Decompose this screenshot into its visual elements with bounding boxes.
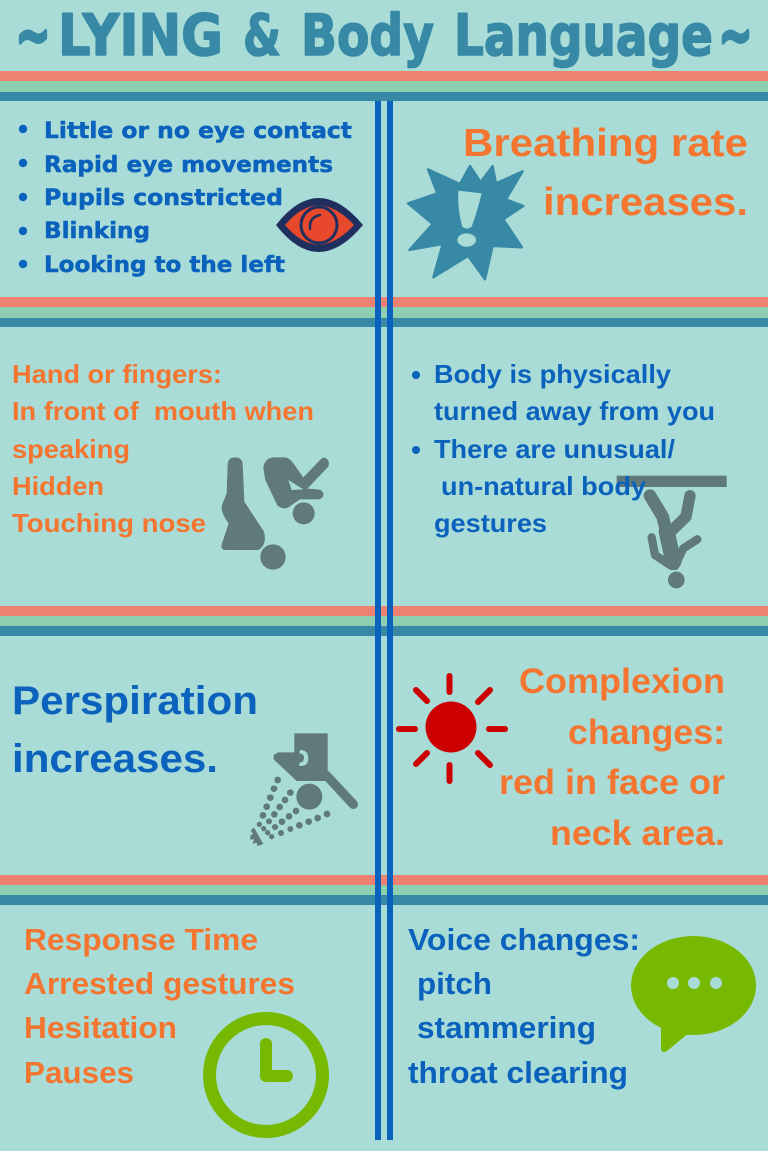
hand gestures text: Hidden bbox=[12, 471, 104, 501]
title: & bbox=[243, 3, 281, 69]
title: ~ bbox=[719, 3, 752, 69]
hand gestures text: Hand or fingers: bbox=[12, 359, 222, 389]
body posture list: un-natural body bbox=[441, 471, 647, 501]
breathing rate text: Breathing rate bbox=[463, 122, 748, 165]
complexion text bbox=[499, 662, 725, 853]
response time text bbox=[24, 922, 295, 1090]
icon: sun bbox=[399, 676, 505, 781]
body posture list bbox=[412, 359, 715, 538]
complexion text: red in face or bbox=[499, 763, 725, 802]
icon: clock bbox=[210, 1018, 322, 1132]
voice changes text: Voice changes: bbox=[408, 922, 640, 957]
hand gestures text: speaking bbox=[12, 434, 130, 464]
voice changes text: pitch bbox=[417, 966, 492, 1001]
eye signals list: Blinking bbox=[44, 219, 150, 244]
title: Body bbox=[301, 3, 434, 69]
breathing rate text: increases. bbox=[543, 181, 748, 224]
eye signals list: Little or no eye contact bbox=[44, 119, 353, 144]
panel: voice changes bbox=[408, 922, 756, 1090]
eye signals list: Pupils constricted bbox=[44, 186, 283, 211]
icon: shower bbox=[250, 733, 353, 846]
icon: hands near face bbox=[221, 457, 329, 570]
response time text: Hesitation bbox=[24, 1010, 177, 1045]
hand gestures text bbox=[12, 359, 314, 538]
voice changes text bbox=[408, 922, 640, 1090]
body posture list: There are unusual/ bbox=[434, 434, 675, 464]
title: LYING bbox=[58, 3, 223, 69]
panel: eye signals bbox=[19, 119, 363, 278]
eye signals list: Rapid eye movements bbox=[44, 153, 333, 178]
panel: complexion bbox=[399, 662, 725, 853]
voice changes text: stammering bbox=[417, 1010, 596, 1045]
hand gestures text: In front of mouth when bbox=[12, 396, 314, 426]
hand gestures text: Touching nose bbox=[12, 508, 206, 538]
complexion text: changes: bbox=[568, 713, 725, 752]
voice changes text: throat clearing bbox=[408, 1055, 628, 1090]
response time text: Arrested gestures bbox=[24, 966, 295, 1001]
icon: speech bubble bbox=[631, 936, 756, 1052]
response time text: Pauses bbox=[24, 1055, 134, 1090]
complexion text: neck area. bbox=[550, 814, 725, 853]
complexion text: Complexion bbox=[519, 662, 725, 701]
title: Language bbox=[454, 3, 713, 69]
perspiration text: increases. bbox=[12, 737, 218, 781]
title: ~ bbox=[16, 3, 50, 69]
panel: breathing rate bbox=[408, 122, 748, 279]
title bbox=[16, 3, 752, 69]
body posture list: turned away from you bbox=[434, 396, 715, 426]
response time text: Response Time bbox=[24, 922, 258, 957]
breathing rate text bbox=[463, 122, 748, 224]
body posture list: gestures bbox=[434, 508, 547, 538]
panel: perspiration bbox=[12, 679, 353, 846]
eye signals list: Looking to the left bbox=[44, 253, 285, 278]
icon: eye bbox=[276, 198, 363, 252]
panel: hand gestures bbox=[12, 359, 329, 570]
perspiration text: Perspiration bbox=[12, 679, 258, 723]
perspiration text bbox=[12, 679, 258, 781]
eye signals list bbox=[19, 119, 353, 278]
icon: alert starburst bbox=[408, 166, 523, 279]
body posture list: Body is physically bbox=[434, 359, 672, 389]
panel: body posture bbox=[412, 359, 727, 588]
icon: upside-down figure bbox=[617, 476, 727, 588]
panel: response time bbox=[24, 922, 322, 1132]
